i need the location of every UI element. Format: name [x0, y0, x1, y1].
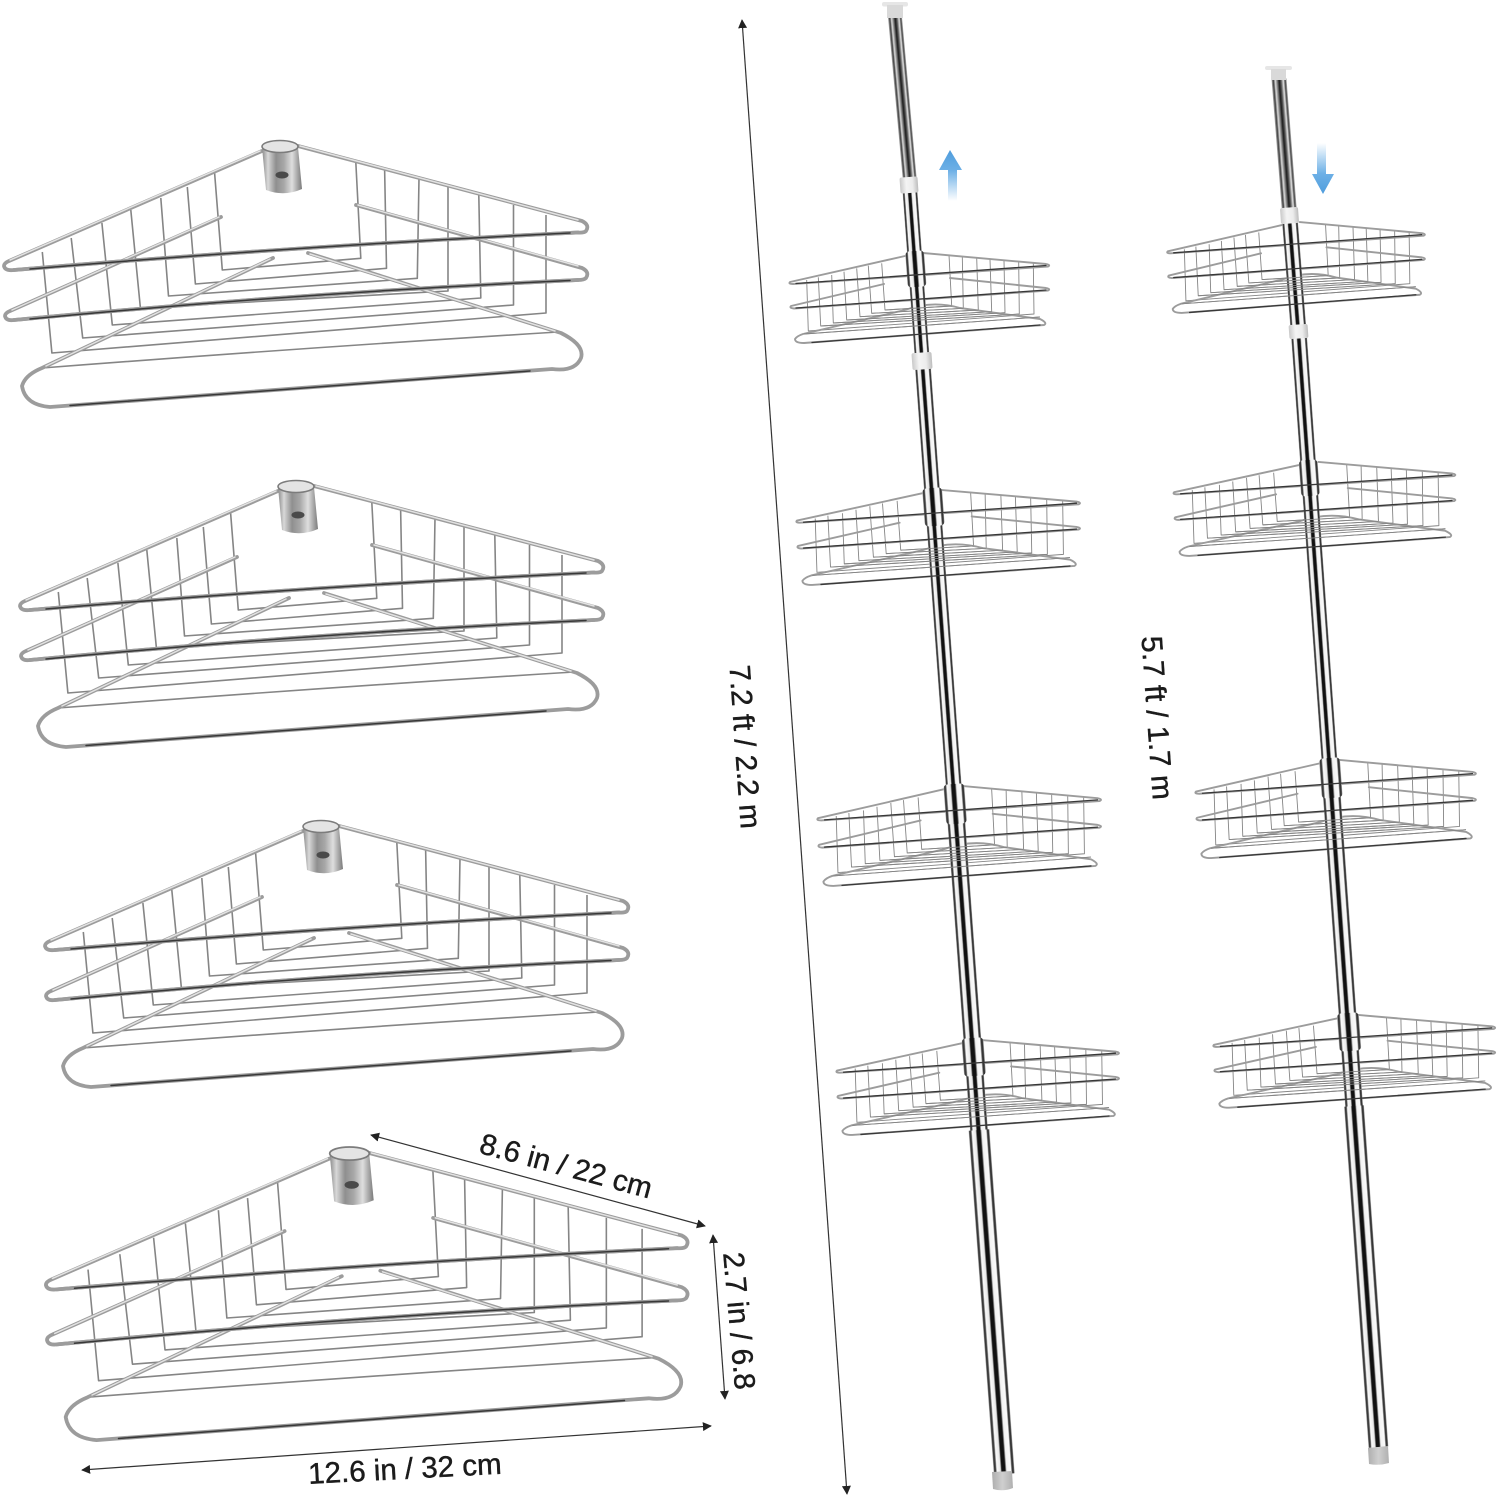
- basket: large view 4 with dimensions: [46, 1147, 688, 1440]
- tall pole rubber foot: [992, 1471, 1013, 1490]
- short pole basket front rails: [1174, 235, 1492, 1107]
- basket: large view 1: [4, 140, 587, 407]
- tall pole assembly: [789, 2, 1119, 1490]
- short pole ceiling cap: [1265, 66, 1292, 80]
- dimension arrow: basket height: [713, 1235, 725, 1399]
- short pole assembly: [1167, 66, 1495, 1465]
- short pole baskets: [1167, 222, 1495, 1108]
- dimension label: maximum height: 7.2 ft / 2.2 m: [723, 664, 767, 830]
- basket: large view 2: [20, 480, 603, 747]
- tall pole tubes: [888, 16, 1015, 1475]
- icon: blue up arrow: [939, 150, 962, 201]
- dimension label: basket width: 12.6 in / 32 cm: [307, 1448, 502, 1491]
- dimension label: minimum height: 5.7 ft / 1.7 m: [1135, 635, 1179, 801]
- tall pole ceiling cap: [882, 2, 908, 18]
- dimension arrow: basket width: [82, 1426, 711, 1470]
- tall pole collars: [899, 176, 933, 370]
- dimension arrow: maximum height: [742, 20, 847, 1494]
- basket: large view 3: [45, 820, 628, 1087]
- short pole collars: [1280, 207, 1308, 339]
- tall pole basket front rails: [796, 266, 1116, 1134]
- icon: blue down arrow: [1312, 143, 1334, 194]
- tall pole baskets: [789, 253, 1119, 1135]
- short pole rubber foot: [1368, 1446, 1389, 1465]
- dimension label: basket height: 2.7 in / 6.8: [716, 1251, 761, 1391]
- short pole tubes: [1272, 78, 1388, 1448]
- dimension arrow: basket side: [371, 1135, 705, 1226]
- dimension label: basket side: 8.6 in / 22 cm: [476, 1127, 656, 1205]
